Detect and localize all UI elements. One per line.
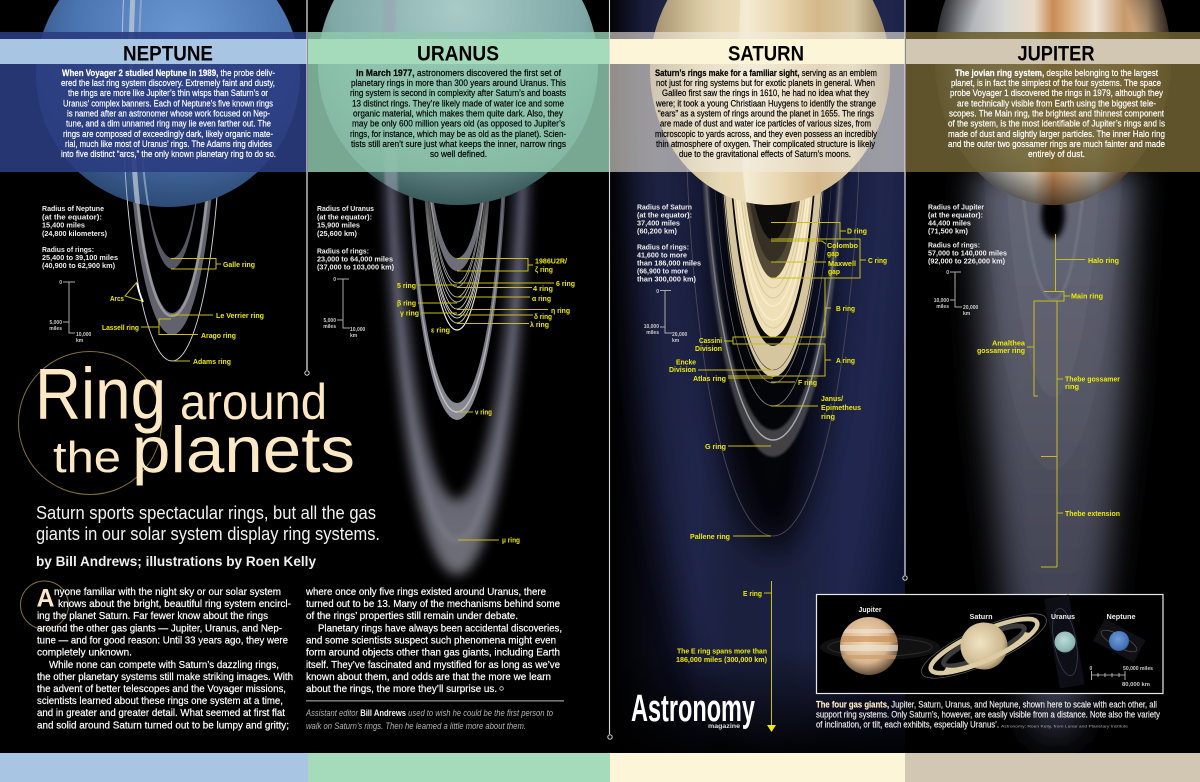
labels: Uranus rings: ν ring bbox=[475, 408, 492, 416]
text block: Neptune statistics: 15,400 miles bbox=[42, 220, 85, 230]
text block: article column 2 bbox=[305, 587, 562, 695]
text block: article column 1 bbox=[37, 587, 293, 731]
illustration: Neptune planet bbox=[36, 0, 300, 207]
text block: Saturn statistics: 37,400 miles bbox=[637, 218, 680, 228]
labels: Jupiter rings: Amalthea bbox=[992, 338, 1026, 348]
labels: Saturn rings: Atlas ring bbox=[693, 374, 726, 383]
labels: Saturn rings: C ring bbox=[868, 256, 887, 265]
labels: Jupiter rings: Thebe extension bbox=[1065, 509, 1120, 518]
title bbox=[35, 354, 355, 486]
labels: Uranus rings: μ ring bbox=[502, 536, 520, 544]
footer band: Neptune bbox=[0, 753, 308, 782]
scale bar: Saturn: miles bbox=[646, 330, 659, 336]
text block: Jupiter statistics: Radius of Jupiter bbox=[928, 202, 984, 212]
text block: inset caption: of inclination, or tilt, each exhibits, especially Uranus’. bbox=[816, 720, 999, 730]
text block: article column 1: the advent of better telescopes and the Voyager missions, bbox=[37, 684, 286, 695]
text block: author note: walk on Saturn’s rings. Then he learned a little more about them. bbox=[306, 721, 526, 731]
labels: Jupiter rings: Main ring bbox=[1071, 292, 1103, 300]
footer band: Saturn bbox=[610, 753, 905, 782]
inset scale bar bbox=[1090, 666, 1153, 688]
text block: Saturn description: are made of dust and water ice particles of various sizes, from bbox=[660, 119, 871, 129]
scale bar: Saturn: 10,000 bbox=[644, 324, 659, 330]
text block: Uranus statistics: 23,000 to 64,000 miles bbox=[317, 254, 393, 264]
text block: Uranus statistics: Radius of rings: bbox=[317, 246, 369, 256]
labels: Uranus rings: η ring bbox=[551, 306, 570, 315]
panel: Saturn overlay bbox=[610, 32, 905, 172]
scale bar: Uranus: 0 bbox=[333, 277, 336, 283]
text block: article column 1: and in greater and greater detail. What seemed at first flat bbox=[37, 708, 285, 719]
labels: Saturn rings: Maxwell bbox=[828, 259, 856, 268]
text block: Neptune statistics bbox=[42, 204, 118, 270]
text block: Neptune statistics: 25,400 to 39,100 miles bbox=[42, 253, 118, 262]
text block: Saturn statistics: Radius of Saturn bbox=[637, 202, 692, 212]
text block: article column 1: knows about the bright, beautiful ring system encircl- bbox=[58, 599, 291, 610]
scale bar: Uranus: 10,000 bbox=[350, 327, 366, 333]
scale bar: Jupiter: miles bbox=[936, 304, 949, 310]
text block: Neptune description: rings are composed of exceedingly dark, likely organic mate- bbox=[63, 129, 273, 139]
header band: Saturn bbox=[610, 39, 905, 64]
icon: Uranus with rings bbox=[1044, 595, 1085, 689]
subtitle: giants in our solar system display ring systems. bbox=[36, 523, 380, 544]
illustration: Saturn outer rings bbox=[685, 0, 861, 536]
labels: Uranus rings: 5 ring bbox=[397, 281, 416, 290]
text block: Neptune description: tune, and a dim unnamed ring may lie even farther out. The bbox=[66, 119, 271, 129]
labels: Saturn rings: gap bbox=[828, 267, 840, 276]
labels: Saturn rings bbox=[669, 222, 887, 732]
labels: Saturn rings: D ring bbox=[847, 226, 867, 236]
illustration: Saturn rings in front of planet bbox=[723, 0, 746, 202]
inset planet labels: Jupiter bbox=[858, 605, 882, 614]
scale bar: Jupiter: km bbox=[963, 311, 971, 317]
subtitle: Saturn sports spectacular rings, but all the gas bbox=[36, 502, 376, 523]
text block: Saturn description: thin atmosphere of oxygen. Their complicated structure is likely bbox=[656, 139, 875, 149]
text block: Uranus statistics: Radius of Uranus bbox=[317, 204, 374, 213]
text block: article column 1: scientists learned about these rings one system at a time, bbox=[37, 696, 283, 707]
text block: Jupiter description: are technically visible from Earth using the biggest tele- bbox=[957, 98, 1156, 108]
header band: Jupiter bbox=[906, 39, 1200, 64]
icon: drop cap circle bbox=[20, 581, 68, 629]
text block: author note bbox=[305, 708, 553, 731]
text block: inset caption bbox=[816, 700, 1160, 730]
text block: Uranus statistics: (at the equator): bbox=[317, 212, 372, 222]
header band: Uranus bbox=[308, 39, 609, 64]
text block: Neptune statistics: (at the equator): bbox=[42, 212, 102, 222]
text block: Uranus description: 13 distinct rings. They’re likely made of water ice and some bbox=[352, 98, 564, 108]
illustration: Uranus planet bbox=[318, 0, 598, 205]
labels: Uranus rings: γ ring bbox=[400, 308, 419, 318]
text block: Neptune statistics: (40,900 to 62,900 km) bbox=[42, 261, 116, 270]
text block: Uranus description: so well defined. bbox=[430, 149, 487, 159]
labels: Neptune rings bbox=[102, 258, 264, 366]
text block: Jupiter description: probe Voyager 1 discovered the rings in 1979, although they bbox=[950, 88, 1163, 98]
labels: Neptune rings: Arago ring bbox=[201, 331, 236, 340]
text block: Uranus description: In March 1977, astronomers discovered the first set of bbox=[356, 68, 561, 78]
text block: Jupiter description: of the system, is the most identifiable of Jupiter’s rings and is bbox=[948, 119, 1165, 129]
labels: Neptune rings: Arcs bbox=[110, 294, 124, 303]
text block: Saturn statistics: than 186,000 miles bbox=[637, 258, 701, 268]
inset scale bar: 0 bbox=[1090, 666, 1092, 672]
text block: Jupiter statistics: 57,000 to 140,000 miles bbox=[928, 248, 1007, 258]
scale bar: Jupiter: 10,000 bbox=[934, 298, 949, 304]
labels: Saturn rings: F ring bbox=[798, 378, 817, 387]
scale bar: Saturn bbox=[644, 289, 688, 344]
text block: Uranus statistics: (25,600 km) bbox=[317, 229, 358, 238]
scale bar: Uranus: miles bbox=[323, 324, 336, 330]
column dividers with end dots bbox=[305, 0, 907, 739]
text block: Uranus description: organic material, which makes them quite dark. Also, they bbox=[353, 108, 563, 118]
text block: article column 2: form around objects other than gas giants, including Earth bbox=[306, 648, 560, 659]
panel: Jupiter overlay bbox=[906, 32, 1200, 172]
labels: Neptune rings: Adams ring bbox=[193, 357, 231, 366]
scale bar: Neptune: 0 bbox=[59, 280, 62, 286]
text block: Neptune description: rial, much like most of Uranus’ rings. The Adams ring divides bbox=[65, 139, 272, 149]
text block: Neptune statistics: Radius of rings: bbox=[42, 245, 94, 254]
text block: Jupiter description bbox=[948, 68, 1165, 159]
text block: inset caption: Astronomy: Roen Kelly, from Lunar and Planetary Institute bbox=[1001, 724, 1128, 728]
text block: article column 1: tune — and for good reason: Until 33 years ago, they were bbox=[37, 636, 288, 646]
illustration: Saturn planet bbox=[650, 0, 890, 205]
labels: Uranus rings: ε ring bbox=[431, 326, 450, 334]
text block: Uranus statistics: (37,000 to 103,000 km) bbox=[317, 262, 395, 272]
labels: Saturn rings: 186,000 miles (300,000 km) bbox=[676, 655, 768, 664]
text block: Saturn statistics: Radius of rings: bbox=[637, 242, 689, 252]
scale bar: Jupiter bbox=[934, 270, 979, 317]
labels: Neptune rings: Lassell ring bbox=[102, 323, 139, 332]
icon: Jupiter with faint ring bbox=[820, 617, 940, 675]
labels: Uranus rings: λ ring bbox=[530, 320, 549, 329]
text block: Jupiter description: scopes. The Main ring, the brightest and thinnest component bbox=[949, 108, 1164, 118]
text block: Saturn description: microscopic to yards across, and they even possess an incredibly bbox=[655, 129, 877, 139]
labels: Saturn rings: The E ring spans more than bbox=[677, 646, 767, 656]
scale bar: Neptune: miles bbox=[49, 326, 62, 332]
illustration: Neptune rings in front of planet bbox=[122, 0, 150, 206]
text block: inset caption: The four gas giants, Jupiter, Saturn, Uranus, and Neptune, shown here to scale with each other, all bbox=[816, 700, 1157, 710]
text block: article column 1: the other planetary systems still make striking images. With bbox=[37, 672, 293, 683]
labels: Saturn rings: B ring bbox=[836, 304, 855, 313]
labels: Uranus rings bbox=[397, 256, 575, 544]
heading: Uranus: URANUS bbox=[417, 42, 499, 66]
text block: article column 1: completely unknown. bbox=[37, 648, 132, 659]
text block: Uranus description: planetary rings in more than 300 years around Uranus. This bbox=[351, 78, 566, 88]
text block: article column 2: Planetary rings have always been accidental discoveries, bbox=[318, 623, 562, 634]
panel: planets to scale inset bbox=[816, 594, 1163, 695]
illustration: Neptune rings bbox=[122, 0, 222, 361]
text block: Neptune description: into five distinct “arcs,” the only known planetary ring to do so. bbox=[61, 149, 276, 159]
labels: Saturn rings: ring bbox=[821, 412, 835, 421]
text block: Saturn description: due to the gravitational effects of Saturn’s moons. bbox=[679, 149, 851, 159]
scale bar: Uranus bbox=[323, 277, 366, 339]
scale bar: Uranus: 5,000 bbox=[323, 318, 336, 324]
text block: article column 1: and solid around Saturn turned out to be lumpy and gritty; bbox=[37, 720, 289, 731]
labels: Neptune rings: Le Verrier ring bbox=[216, 311, 264, 320]
logo: Astronomy magazine: magazine bbox=[708, 723, 740, 730]
icon: Neptune with rings bbox=[1093, 619, 1145, 662]
text block: Neptune description bbox=[61, 68, 276, 159]
icon: end mark bbox=[500, 687, 503, 690]
text block: article column 2: about the rings, the more they’ll surprise us. bbox=[306, 684, 497, 695]
labels: Saturn rings: Division bbox=[669, 365, 696, 374]
text block: Uranus statistics: 15,900 miles bbox=[317, 220, 360, 230]
text block: Saturn description: “ears” as a system of rings around the planet in 1655. The rings bbox=[658, 108, 874, 118]
text block: Neptune statistics: Radius of Neptune bbox=[42, 204, 104, 213]
text block: Neptune description: Uranus’ complex banners. Each of Neptune’s five known rings bbox=[63, 98, 273, 108]
text block: Jupiter description: entirely of dust. bbox=[1028, 149, 1085, 159]
title: around bbox=[180, 374, 327, 430]
inset scale bar: 80,000 km bbox=[1122, 682, 1151, 688]
footer band: Uranus bbox=[308, 753, 610, 782]
heading: Jupiter: JUPITER bbox=[1018, 42, 1094, 66]
inset planet labels: Uranus bbox=[1051, 612, 1075, 621]
text block: article column 2: where once only five rings existed around Uranus, there bbox=[305, 587, 546, 598]
labels: Saturn rings: Janus/ bbox=[821, 394, 843, 403]
text block: Uranus description: may be only 600 million years old (as opposed to Jupiter’s bbox=[352, 119, 565, 129]
text block: Saturn statistics: (at the equator): bbox=[637, 210, 692, 220]
title: Ring bbox=[35, 354, 166, 434]
text block: Jupiter statistics: (at the equator): bbox=[928, 210, 983, 220]
text block: Jupiter description: planet, is in fact the simplest of the four systems. The space bbox=[951, 78, 1161, 88]
labels: Saturn rings: Encke bbox=[676, 358, 696, 366]
drop cap: A bbox=[36, 584, 54, 612]
text block: Jupiter description: The jovian ring system, despite belonging to the largest bbox=[955, 68, 1158, 78]
text block: Uranus statistics bbox=[317, 204, 395, 272]
text block: Neptune description: When Voyager 2 studied Neptune in 1989, the probe deliv- bbox=[62, 68, 275, 78]
text block: article column 1: While none can compete with Saturn’s dazzling rings, bbox=[49, 660, 279, 671]
text block: article column 2: itself. They’ve fascinated and mystified for as long as we’ve bbox=[306, 660, 560, 671]
labels: Saturn rings: Colombo bbox=[827, 241, 858, 250]
header band: Neptune bbox=[0, 39, 307, 64]
text block: Saturn description bbox=[655, 68, 877, 159]
labels: Jupiter rings: ring bbox=[1065, 382, 1079, 391]
text block: Neptune statistics: (24,800 kilometers) bbox=[42, 229, 108, 238]
panel: Saturn background glow bbox=[610, 0, 918, 770]
scale bar: Neptune: 5,000 bbox=[49, 320, 62, 326]
panel: Neptune overlay bbox=[0, 32, 307, 172]
text block: Saturn description: Saturn’s rings make for a familiar sight, serving as an emblem bbox=[655, 68, 877, 78]
labels: Saturn rings: Pallene ring bbox=[690, 532, 730, 541]
text block: Uranus description: rings, for instance, which may be as old as the planet). Scien- bbox=[350, 129, 566, 139]
text block: article column 2: and some scientists suspect such phenomena might even bbox=[306, 636, 556, 646]
panel: Uranus overlay bbox=[308, 32, 609, 172]
labels: Saturn rings: Epimetheus bbox=[821, 403, 861, 412]
text block: article column 1: ing the planet Saturn. Far fewer know about the rings bbox=[37, 611, 268, 622]
text block: Jupiter description: made of dust and slightly larger particles. The inner Halo ring bbox=[948, 129, 1165, 139]
illustration: Jupiter planet bbox=[935, 0, 1171, 205]
labels: Uranus rings: 1986U2R/ bbox=[535, 256, 567, 266]
text block: Saturn description: Galileo first saw the rings in 1610, he had no idea what they bbox=[662, 88, 869, 98]
labels: Jupiter rings: Thebe gossamer bbox=[1065, 374, 1120, 384]
scale bar: Uranus: km bbox=[350, 333, 358, 339]
scale bar: Neptune: km bbox=[76, 338, 84, 344]
text block: Saturn statistics: (66,900 to more bbox=[637, 266, 688, 276]
title: planets bbox=[132, 413, 355, 486]
text block: article column 1: nyone familiar with the night sky or our solar system bbox=[54, 587, 281, 598]
byline: by Bill Andrews; illustrations by Roen Kelly bbox=[36, 554, 316, 569]
text block: Jupiter statistics bbox=[928, 202, 1007, 266]
subtitle bbox=[36, 502, 380, 544]
footer band: Jupiter bbox=[905, 753, 1200, 782]
heading: Neptune: NEPTUNE bbox=[123, 42, 213, 66]
scale bar: Saturn: 0 bbox=[656, 289, 659, 295]
labels: Saturn rings: E ring bbox=[743, 589, 762, 598]
labels: Uranus rings: α ring bbox=[532, 294, 551, 303]
text block: Jupiter description: and the outer two gossamer rings are much fainter and made bbox=[948, 139, 1165, 149]
illustration: Saturn main rings bbox=[719, 0, 827, 377]
inset planet labels: Neptune bbox=[1106, 612, 1136, 621]
inset planet labels: Saturn bbox=[970, 612, 993, 621]
text block: Jupiter statistics: 44,400 miles bbox=[928, 218, 971, 228]
text block: Jupiter statistics: Radius of rings: bbox=[928, 240, 980, 250]
illustration: Uranus ring in front of planet bbox=[384, 0, 399, 192]
text block: author note: Assistant editor Bill Andrews used to wish he could be the first person to bbox=[305, 708, 553, 718]
text block: Saturn statistics: (60,200 km) bbox=[637, 226, 678, 236]
text block: Uranus description bbox=[350, 68, 566, 159]
icon: Saturn with rings bbox=[912, 597, 1056, 695]
scale bar: Saturn: km bbox=[672, 338, 680, 344]
rule above author note bbox=[306, 700, 564, 702]
labels: Jupiter rings: gossamer ring bbox=[977, 346, 1025, 355]
labels: Saturn rings: Division bbox=[695, 344, 722, 353]
scale bar: Neptune bbox=[49, 280, 92, 344]
labels: Neptune rings: Galle ring bbox=[223, 260, 255, 269]
logo: Astronomy magazine: Astronomy bbox=[631, 688, 755, 730]
title: the bbox=[53, 433, 121, 482]
labels: Saturn rings: gap bbox=[827, 249, 839, 258]
text block: article column 2: turned out to be 13. Many of the mechanisms behind some bbox=[306, 599, 560, 610]
inset planet labels bbox=[858, 605, 1136, 621]
logo: Astronomy magazine bbox=[631, 688, 755, 730]
text block: Jupiter statistics: (71,500 km) bbox=[928, 226, 969, 236]
panel: Jupiter background glow bbox=[975, 0, 1135, 740]
scale bar: Jupiter: 0 bbox=[946, 270, 949, 276]
text block: Uranus description: tists still aren’t sure just what keeps the inner, narrow rings bbox=[351, 139, 566, 149]
text block: article column 2: of the rings’ properties still remain under debate. bbox=[306, 611, 518, 622]
text block: article column 2: known about them, and odds are that the more we learn bbox=[306, 672, 551, 683]
text block: Neptune description: the rings are more like Jupiter’s thin wisps than Saturn’s or bbox=[68, 88, 268, 98]
text block: Neptune description: ered the last ring system discovery. Extremely faint and dusty, bbox=[61, 78, 275, 88]
labels: Jupiter rings bbox=[977, 234, 1120, 567]
labels: Uranus rings: δ ring bbox=[534, 312, 552, 321]
labels: Uranus rings: ζ ring bbox=[535, 265, 553, 274]
inset scale bar: 50,000 miles bbox=[1123, 666, 1153, 672]
text block: Saturn description: not just for ring systems but for exotic planets in general. When bbox=[656, 78, 875, 88]
labels: Uranus rings: β ring bbox=[397, 298, 416, 308]
scale bar: Saturn: 20,000 bbox=[672, 332, 688, 338]
scale bar: Jupiter: 20,000 bbox=[963, 305, 979, 311]
text block: Jupiter statistics: (92,000 to 226,000 km) bbox=[928, 256, 1006, 266]
icon: title ring circle bbox=[18, 352, 162, 494]
labels: Saturn rings: Cassini bbox=[699, 336, 722, 345]
text block: Saturn description: were; it took a young Christiaan Huygens to identify the strange bbox=[655, 98, 876, 108]
text block: Saturn statistics bbox=[637, 202, 701, 284]
labels: Uranus rings: 4 ring bbox=[533, 284, 553, 293]
text block: Saturn statistics: than 300,000 km) bbox=[637, 274, 697, 284]
illustration: Uranus rings bbox=[382, 0, 532, 575]
text block: article column 1: around the other gas giants — Jupiter, Uranus, and Nep- bbox=[37, 623, 282, 634]
text block: Saturn statistics: 41,600 to more bbox=[637, 250, 687, 260]
scale bar: Neptune: 10,000 bbox=[76, 332, 92, 338]
labels: Saturn rings: G ring bbox=[705, 442, 726, 451]
labels: Saturn rings: A ring bbox=[836, 356, 855, 365]
text block: Uranus description: ring system is second in complexity after Saturn’s and boasts bbox=[350, 88, 566, 98]
text block: Neptune description: is named after an astronomer whose work focused on Nep- bbox=[67, 108, 270, 118]
labels: Uranus rings: 6 ring bbox=[556, 279, 575, 288]
labels: Jupiter rings: Halo ring bbox=[1088, 256, 1119, 265]
heading: Saturn: SATURN bbox=[728, 42, 804, 66]
